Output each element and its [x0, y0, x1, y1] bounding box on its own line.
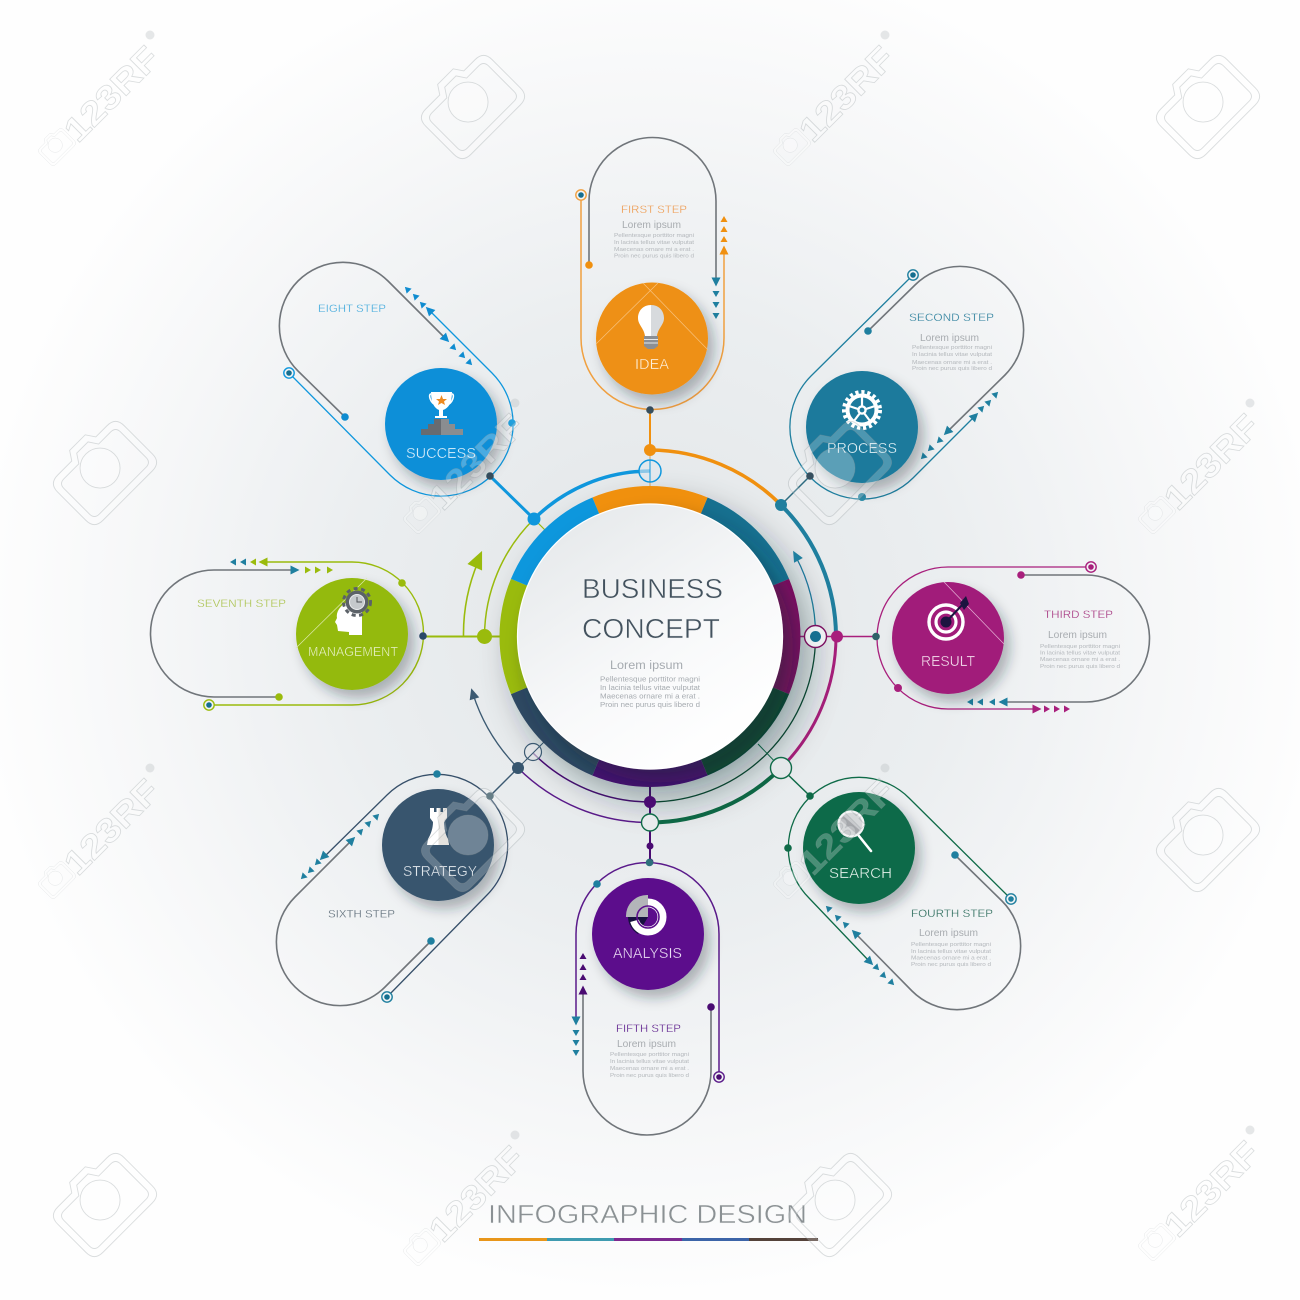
end nodes: [284, 368, 516, 480]
step text: Proin nec purus quis libero d: [1040, 664, 1120, 670]
arrow markers: [823, 903, 897, 988]
icon: light bulb: [638, 305, 664, 349]
icon: rook: [427, 808, 449, 845]
step text: SIXTH STEP: [328, 908, 395, 920]
network nodes: [466, 444, 843, 866]
step text: Maecenas ornare mi a erat .: [614, 247, 694, 253]
step text: Lorem ipsum: [622, 220, 681, 231]
step text: Proin nec purus quis libero d: [614, 254, 694, 260]
step text: Proin nec purus quis libero d: [911, 962, 991, 968]
arrow markers: [918, 389, 1001, 462]
step text: FOURTH STEP: [911, 908, 993, 920]
pill outlines: [788, 777, 1021, 1010]
step text: Pellentesque porttitor magni: [610, 1052, 689, 1058]
title colour bar: [479, 1238, 818, 1241]
process circle: PROCESS: [827, 440, 897, 457]
arrow markers: [712, 216, 728, 319]
step text: Pellentesque porttitor magni: [911, 942, 991, 948]
icon: gear: [844, 392, 880, 428]
arrow markers: [572, 953, 588, 1056]
success circle: [385, 368, 497, 480]
arrow markers: [298, 811, 382, 882]
step text: Proin nec purus quis libero d: [912, 366, 992, 372]
icon: donut chart: [626, 895, 662, 934]
icon: trophy on podium: [421, 392, 463, 435]
step text: Maecenas ornare mi a erat .: [1040, 657, 1120, 663]
success circle: SUCCESS: [406, 446, 476, 462]
step text: [911, 908, 993, 968]
step text: In lacinia tellus vitae vulputat: [1040, 650, 1120, 656]
end nodes: [204, 579, 427, 710]
analysis circle: [592, 878, 704, 990]
centre body text: [600, 660, 701, 709]
search circle: [803, 792, 915, 904]
panel: second step: [790, 266, 1024, 501]
idea circle: [596, 282, 708, 394]
panel: eighth step: [279, 262, 516, 496]
panel: third step: [872, 562, 1150, 714]
step text: [909, 312, 994, 372]
pill outlines: [581, 138, 724, 409]
end nodes: [382, 770, 494, 1002]
step text: SEVENTH STEP: [197, 598, 286, 610]
pill outlines: [790, 266, 1024, 499]
step text: [610, 1023, 689, 1079]
step text: In lacinia tellus vitae vulputat: [610, 1059, 689, 1065]
step text: In lacinia tellus vitae vulputat: [911, 949, 991, 955]
result circle: [892, 582, 1004, 694]
pill outlines: [576, 863, 719, 1135]
strategy circle: STRATEGY: [403, 864, 477, 880]
pill outlines: [276, 774, 508, 1006]
centre heading: BUSINESS: [582, 573, 723, 604]
process circle: [806, 371, 918, 483]
end nodes: [806, 270, 918, 501]
arrow markers: [402, 284, 475, 368]
end nodes: [576, 190, 654, 414]
step text: [1040, 609, 1120, 670]
search circle: SEARCH: [829, 866, 892, 882]
centre body text: Pellentesque porttitor magni: [600, 674, 700, 684]
step text: Pellentesque porttitor magni: [1040, 644, 1120, 650]
title: INFOGRAPHIC DESIGN: [488, 1199, 807, 1229]
step text: [614, 204, 694, 260]
central hub: [423, 410, 876, 866]
end nodes: [593, 859, 724, 1082]
step text: Maecenas ornare mi a erat .: [610, 1066, 689, 1072]
step text: Maecenas ornare mi a erat .: [912, 360, 992, 366]
step text: Lorem ipsum: [919, 928, 978, 939]
step text: In lacinia tellus vitae vulputat: [614, 240, 694, 246]
icon: target: [929, 596, 969, 639]
centre heading: CONCEPT: [582, 613, 720, 644]
outer arc network: [423, 410, 876, 862]
arrow markers: [230, 558, 333, 574]
step text: SECOND STEP: [909, 312, 994, 324]
centre body text: In lacinia tellus vitae vulputat: [600, 683, 701, 692]
panel: fourth step: [784, 777, 1021, 1010]
step text: Pellentesque porttitor magni: [912, 345, 992, 351]
centre body text: Lorem ipsum: [610, 660, 683, 672]
white centre disc: [518, 504, 782, 769]
centre body text: Maecenas ornare mi a erat .: [600, 692, 700, 700]
step text: THIRD STEP: [1044, 609, 1113, 621]
step text: Proin nec purus quis libero d: [610, 1073, 689, 1079]
end nodes: [784, 792, 1016, 904]
analysis circle: ANALYSIS: [613, 946, 682, 962]
step text: FIRST STEP: [621, 204, 687, 216]
step text: Lorem ipsum: [617, 1039, 676, 1050]
step text: EIGHT STEP: [318, 303, 386, 315]
panel: first step: [576, 138, 728, 414]
step text: In lacinia tellus vitae vulputat: [912, 352, 992, 358]
pill outlines: [279, 262, 513, 496]
pill outlines: [150, 562, 423, 705]
panel: seventh step: [150, 558, 427, 710]
step text: Lorem ipsum: [920, 333, 979, 344]
step text: FIFTH STEP: [616, 1023, 681, 1035]
end nodes: [872, 562, 1096, 692]
arrow markers: [967, 698, 1070, 714]
icon: magnifier: [838, 812, 871, 851]
pill outlines: [877, 567, 1150, 709]
result circle: RESULT: [921, 654, 975, 670]
ring of eight coloured segments: [509, 495, 791, 778]
centre body text: Proin nec purus quis libero d: [600, 700, 700, 709]
panel: fifth step: [572, 859, 724, 1135]
panel: sixth step: [276, 770, 508, 1006]
centre heading: [582, 573, 723, 644]
management circle: MANAGEMENT: [308, 644, 398, 659]
icon: head with gear: [335, 588, 370, 635]
step text: Pellentesque porttitor magni: [614, 233, 694, 239]
strategy circle: [382, 789, 494, 901]
step text: Maecenas ornare mi a erat .: [911, 956, 991, 962]
idea circle: IDEA: [635, 356, 669, 373]
step text: Lorem ipsum: [1048, 630, 1107, 641]
management circle: [296, 578, 408, 690]
